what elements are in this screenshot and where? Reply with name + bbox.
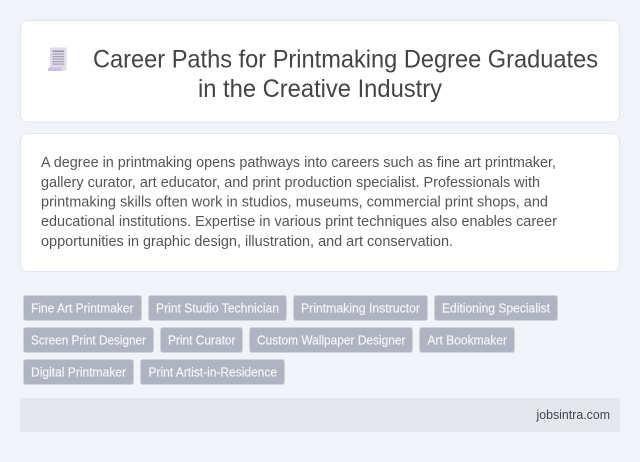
- text block: description: A degree in printmaking opens pathways into careers such as fine art printmaker,: [41, 155, 556, 171]
- tag: Fine Art Printmaker: Fine Art Printmaker: [31, 302, 134, 316]
- text block: description: printmaking skills often work in studios, museums, commercial print shops, and: [41, 194, 548, 210]
- tag list: [24, 296, 558, 384]
- tag: Digital Printmaker: Digital Printmaker: [31, 366, 126, 380]
- footer bar: [20, 398, 620, 432]
- tag: Print Studio Technician: [148, 296, 286, 320]
- text block: description: opportunities in graphic design, illustration, and art conservation.: [41, 234, 453, 250]
- tag: Print Artist-in-Residence: Print Artist-in-Residence: [148, 366, 277, 380]
- tag: Print Artist-in-Residence: [140, 360, 284, 384]
- tag: Art Bookmaker: Art Bookmaker: [428, 334, 507, 348]
- tag: Print Curator: Print Curator: [168, 334, 236, 348]
- tag: Printmaking Instructor: [294, 296, 428, 320]
- tag: Custom Wallpaper Designer: Custom Wallpaper Designer: [257, 334, 406, 348]
- text block: description: [41, 155, 557, 250]
- title: [93, 46, 598, 103]
- tag: Screen Print Designer: [24, 328, 154, 352]
- tag: Digital Printmaker: [24, 360, 134, 384]
- tag: Editioning Specialist: Editioning Specialist: [442, 302, 551, 316]
- tag: Print Curator: [160, 328, 242, 352]
- footer text: site name: jobsintra.com: [536, 408, 610, 422]
- tag: Custom Wallpaper Designer: [250, 328, 412, 352]
- panel: header card: [20, 20, 620, 122]
- text block: description: gallery curator, art educator, and print production specialist. Professionals with: [41, 175, 540, 191]
- tag: Editioning Specialist: [434, 296, 558, 320]
- tag: Screen Print Designer: Screen Print Designer: [31, 334, 146, 348]
- tag: Art Bookmaker: [420, 328, 514, 352]
- title: in the Creative Industry: [198, 75, 442, 103]
- tag: Print Studio Technician: Print Studio Technician: [156, 302, 279, 316]
- title: Career Paths for Printmaking Degree Graduates: [93, 46, 598, 74]
- tag: Printmaking Instructor: Printmaking Instructor: [301, 302, 420, 316]
- tag: Fine Art Printmaker: [24, 296, 142, 320]
- panel: description card: [20, 134, 620, 272]
- text block: description: educational institutions. Expertise in various print techniques also enables career: [41, 214, 557, 230]
- icon: printed scroll document: [48, 48, 66, 71]
